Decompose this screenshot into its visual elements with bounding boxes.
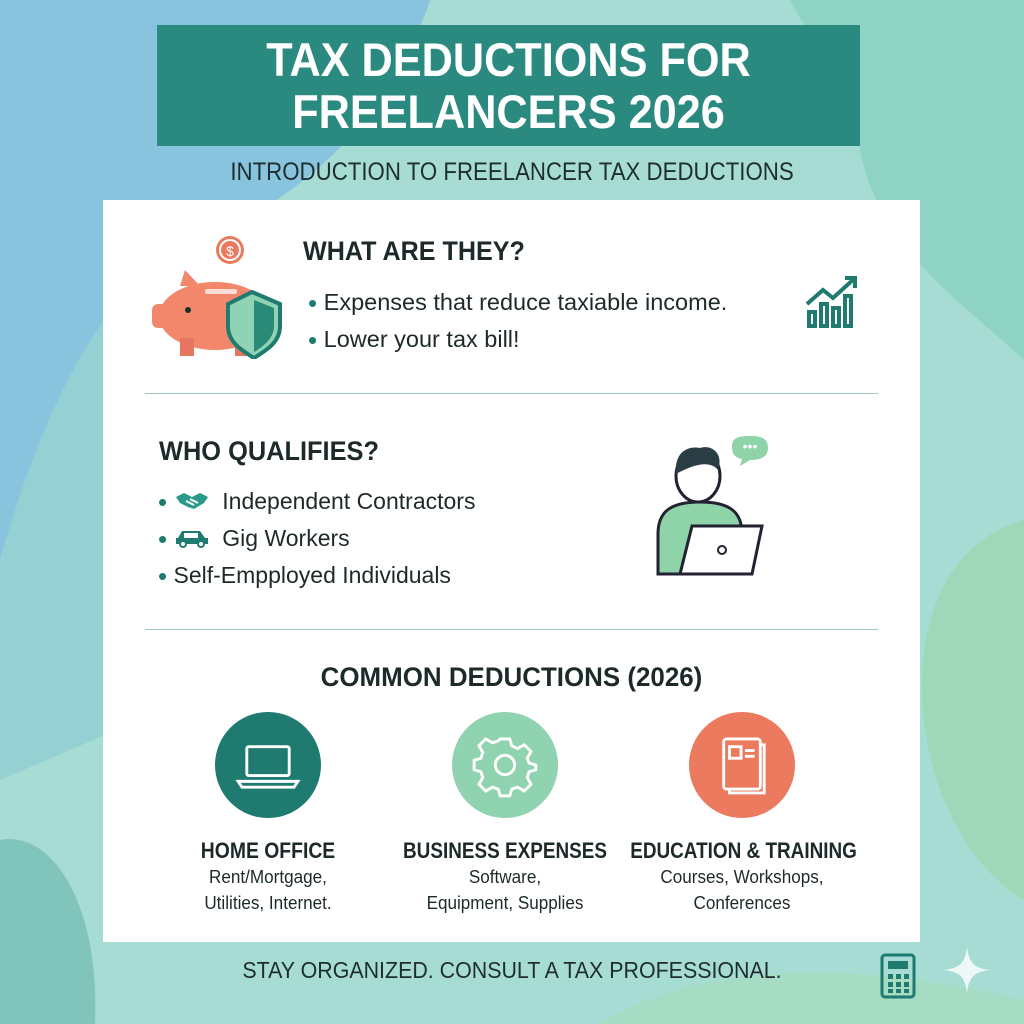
text: what are they bullets: • Lower your tax bill! (308, 325, 520, 355)
list: who qualifies: • Independent Contractors (158, 487, 475, 517)
card: home office (201, 712, 335, 913)
card: education & training: Conferences (694, 893, 790, 913)
icon: book (689, 712, 795, 818)
icon: piggy bank with shield: $ (226, 243, 234, 259)
icon: sparkle (944, 948, 990, 992)
card: home office: Utilities, Internet. (204, 893, 332, 913)
list: who qualifies (158, 487, 475, 591)
heading: who qualifies: WHO QUALIFIES? (159, 436, 379, 466)
icon: person at laptop: ••• (743, 438, 757, 454)
icon: calculator (880, 954, 916, 998)
main panel (103, 200, 920, 942)
card: business expenses: BUSINESS EXPENSES (403, 838, 607, 863)
icon: growth chart (806, 276, 857, 328)
card: education & training: Courses, Workshops, (660, 867, 824, 887)
card: home office: HOME OFFICE (201, 838, 335, 863)
list: who qualifies: • Gig Workers (158, 524, 350, 554)
card: business expenses: Software, (469, 867, 541, 887)
card: business expenses: Equipment, Supplies (427, 893, 583, 913)
divider (145, 629, 878, 630)
heading: common deductions: COMMON DEDUCTIONS (2026) (321, 662, 702, 692)
title banner (157, 25, 860, 146)
card: education & training: EDUCATION & TRAINING (630, 838, 857, 863)
text: what are they bullets: • Expenses that reduce taxiable income. (308, 288, 727, 318)
icon: person at laptop (656, 436, 768, 576)
text: what are they bullets (308, 288, 727, 355)
icon: gear (452, 712, 558, 818)
divider (145, 393, 878, 394)
heading: what are they: WHAT ARE THEY? (303, 236, 525, 266)
footer text: STAY ORGANIZED. CONSULT A TAX PROFESSIONAL. (242, 957, 782, 983)
icon: laptop (215, 712, 321, 818)
card: home office: Rent/Mortgage, (209, 867, 327, 887)
icon: piggy bank with shield (152, 236, 282, 359)
title banner: TAX DEDUCTIONS FOR (266, 33, 751, 86)
card: business expenses (403, 712, 607, 913)
card: education & training (630, 712, 857, 913)
subtitle: INTRODUCTION TO FREELANCER TAX DEDUCTIONS (230, 158, 794, 186)
list: who qualifies: • Self-Empployed Individuals (158, 561, 451, 591)
title banner: FREELANCERS 2026 (292, 85, 725, 138)
